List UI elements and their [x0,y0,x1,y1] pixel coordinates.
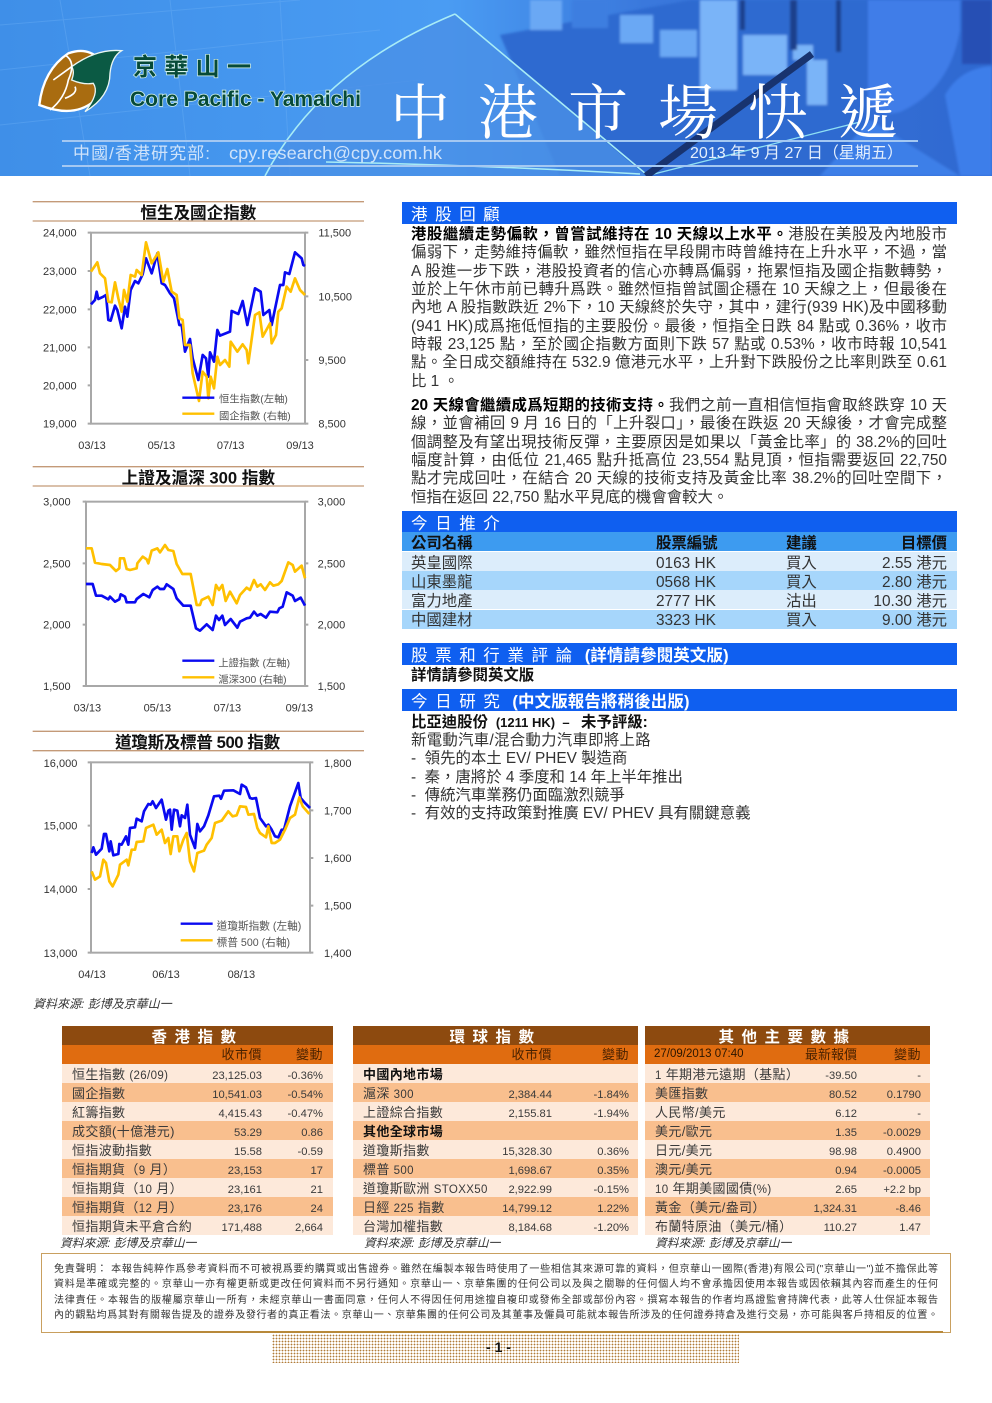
section heading: stock and sector comments [402,643,957,665]
table: Hong Kong indices: 成交額(十億港元) [72,1124,175,1139]
x axis labels: 03/13 [78,440,106,452]
row: 2.55 港元 [882,554,947,572]
table: other key data: -0.0029 [883,1126,921,1138]
company rating: 比亞迪股份 (1211 HK) – 未予評級: [411,714,648,730]
header rules [62,140,918,167]
y axis labels: 21,000 [43,342,77,354]
x axis labels: 09/13 [286,440,314,452]
table header: 公司名稱 [411,534,473,552]
x axis labels [78,969,255,981]
x axis labels [78,440,314,452]
y axis labels: 1,700 [324,805,352,817]
row: 9.00 港元 [882,612,947,629]
table: Hong Kong indices: 恒指期貨（10 月） [72,1181,183,1196]
table: other key data: 澳元/美元 [655,1162,712,1177]
table: global indices: 0.35% [597,1164,629,1176]
row [402,590,957,609]
review paragraph 1: 港股繼續走勢偏軟，曾嘗試維持在 10 天線以上水平。港股在美股及內地股市 [411,226,947,243]
table: global indices: 滬深 300 [363,1086,414,1101]
table: global indices: 上證綜合指數 [363,1105,443,1120]
y axis labels: 22,000 [43,304,77,316]
table: other key data: 98.98 [829,1146,857,1158]
table: Hong Kong indices: 23,161 [228,1184,262,1196]
page number band [272,1334,739,1363]
disclaimer text: 資料是準確或完整的。京華山一亦有權更新或更改任何資料而不另行通知。京華山一、京華集團的任何公司以及與之關聯的任何個人均不會承擔因使用本報告或因依賴其內容而產生的任何 [54,1279,938,1290]
table: Hong Kong indices: -0.59 [298,1146,323,1158]
table: global indices: 日經 225 指數 [363,1200,445,1215]
review paragraph 1: 內地 A 股指數跌近 2%下，10 天線終於失守，其中，建行(939 HK)及中國移動 [411,299,947,316]
review paragraph 2: 幅度計算，由低位 21,465 點升抵高位 23,554 點見頂，恒指需要返回 22,750 [411,452,947,469]
table: global indices: 8,184.68 [508,1222,552,1234]
header banner [0,0,992,176]
review paragraph 1: A 股進一步下跌，港股投資者的信心亦轉爲偏弱，拖累恒指及國企指數轉勢， [411,263,947,280]
series: Shanghai [86,584,305,631]
table: global indices: 收市價 [511,1047,552,1062]
table: global indices: 14,799.12 [502,1202,552,1214]
table: global indices: 道瓊斯指數 [363,1143,430,1158]
y axis labels [43,497,345,693]
table header: 目標價 [901,534,947,552]
department: 中國/香港研究部: [73,144,210,163]
x axis labels: 07/13 [217,440,244,452]
logo text: Core Pacific - Yamaichi [130,88,361,111]
review paragraph 1: 偏弱下，走勢維持偏軟，雖然恒指在早段開市時曾維持在上升水平，不過，當 [411,244,947,261]
heading [402,511,957,532]
table: Hong Kong indices: -0.47% [288,1108,323,1120]
comment note: 詳情請參閱英文版 [411,667,534,684]
logo text [130,54,361,111]
bullet: - 傳統汽車業務仍面臨激烈競爭 [411,787,625,804]
review paragraph 1: 並於上午休市前已轉升爲跌。雖然恒指曾試圖企穩在 10 天線之上，但最後在 [411,281,947,298]
table: Hong Kong indices: 15.58 [234,1146,262,1158]
y axis labels: 14,000 [44,884,77,896]
table: other key data: 美匯指數 [655,1086,708,1101]
y axis labels: 2,500 [318,558,345,570]
review paragraph 1 [411,226,947,390]
review paragraph 1: 比 1 。 [411,373,459,390]
y axis labels: 10,500 [318,291,352,303]
x axis labels: 05/13 [148,440,175,452]
table: global indices: 1.22% [597,1202,629,1214]
table: other key data: 黃金（美元/盎司） [655,1200,766,1215]
table: other key data: 80.52 [829,1088,857,1100]
legend [182,392,291,423]
x axis labels [74,703,313,715]
y axis labels: 24,000 [43,228,77,240]
disclaimer box [41,1253,951,1333]
table: global indices: -0.15% [594,1184,629,1196]
table: global indices: -1.94% [594,1108,629,1120]
series: HSCEI [91,242,305,401]
table: Hong Kong indices: 恒生指數 (26/09) [72,1067,168,1082]
table: global indices: -1.20% [594,1222,629,1234]
x axis labels: 04/13 [78,969,106,981]
chart title: 道瓊斯及標普 500 指數 [115,732,281,752]
chart title [33,731,364,752]
bullet: - 有效的支持政策對推廣 EV/ PHEV 具有關鍵意義 [411,805,750,822]
table: other key data: +2.2 bp [883,1184,921,1196]
row: 買入 [786,612,817,629]
row: 買入 [786,554,817,572]
bullet: - 秦，唐將於 4 季度和 14 年上半年推出 [411,768,683,786]
plot axes [83,502,308,686]
table: other key data: 1 年期港元遠期（基點） [655,1067,799,1082]
table: other key data: 0.4900 [887,1146,921,1158]
x axis labels: 08/13 [228,969,255,981]
table: other key data [645,1026,930,1235]
table: other key data: - [917,1108,921,1120]
series: HSI [91,252,305,380]
table: other key data: -8.46 [896,1202,921,1214]
y axis labels: 3,000 [318,497,345,509]
y axis labels: 8,500 [318,419,346,431]
table source: 資料來源: 彭博及京華山一 [60,1236,196,1250]
y axis labels: 3,000 [43,497,71,509]
chart title: 恒生及國企指數 [140,202,257,222]
table source: 資料來源: 彭博及京華山一 [364,1236,500,1250]
table: Hong Kong indices: 53.29 [234,1126,262,1138]
x axis labels: 09/13 [286,703,313,715]
table: global indices: 中國內地市場 [363,1067,443,1082]
table: Hong Kong indices: 恒指期貨（12 月） [72,1200,183,1215]
logo [39,50,122,112]
legend: 道瓊斯指數 (左軸) [217,919,301,932]
table: other key data: 變動 [894,1047,921,1062]
table: global indices: 變動 [602,1047,629,1062]
row: 10.30 港元 [873,592,947,610]
plot axes [88,233,308,424]
row: 中國建材 [411,612,473,629]
disclaimer text [54,1263,938,1321]
legend: 恒生指數(左軸) [219,392,288,405]
table: other key data: 2.65 [835,1184,857,1196]
chart source note: 資料來源: 彭博及京華山一 [33,997,172,1011]
table: other key data: - [917,1070,921,1082]
y axis labels: 2,000 [318,620,345,632]
chart title [33,467,364,487]
page number band: - 1 - [486,1339,511,1355]
table: other key data: 1.47 [899,1222,921,1234]
email: cpy.research@cpy.com.hk [229,143,442,163]
table: global indices: -1.84% [594,1088,629,1100]
main title: 中港市場快遞 [390,66,898,152]
y axis labels: 2,000 [43,620,71,632]
table: Hong Kong indices: 23,153 [228,1164,262,1176]
y axis labels: 20,000 [43,380,77,392]
table: global indices: 1,698.67 [508,1164,552,1176]
table: global indices: 0.36% [597,1146,629,1158]
table: Hong Kong indices: 恒指期貨（9 月） [72,1162,176,1177]
y axis labels: 23,000 [43,266,77,278]
table: other key data: 美元/歐元 [655,1124,712,1139]
row: 買入 [786,574,817,590]
table: other key data: 10 年期美國國債(%) [655,1181,772,1196]
table: Hong Kong indices: -0.36% [288,1070,323,1082]
table: Hong Kong indices: 恒指波動指數 [72,1143,152,1158]
table: other key data: 布蘭特原油（美元/桶） [655,1219,792,1234]
table: other key data: 最新報價 [805,1047,857,1062]
row [402,610,957,629]
y axis labels: 9,500 [318,355,346,367]
table: global indices: 其他全球市場 [363,1124,443,1139]
table: Hong Kong indices: 紅籌指數 [72,1105,125,1120]
table source: 資料來源: 彭博及京華山一 [655,1236,791,1250]
y axis labels: 1,800 [324,758,352,770]
row: 沽出 [786,592,817,610]
table: global indices: 2,922.99 [508,1184,552,1196]
table header [402,532,957,551]
x axis labels: 05/13 [144,703,171,715]
section heading: today's research: 今日研究 (中文版報告將稍後出版) [411,693,690,711]
review paragraph 2 [411,397,947,506]
row: 2777 HK [656,592,716,610]
y axis labels: 1,500 [43,681,71,693]
table: other key data: -0.0005 [883,1164,921,1176]
legend: 國企指數 (右軸) [219,410,291,423]
table: other key data: 110.27 [824,1222,857,1234]
background cylinders [868,0,960,114]
row: 3323 HK [656,612,716,629]
legend [182,656,290,686]
section heading: HK market review [402,202,957,224]
row: 0568 HK [656,574,716,590]
section heading: HK market review: 港股回顧 [411,206,507,224]
table: Hong Kong indices: 恒指期貨未平倉合約 [72,1219,192,1234]
background data block [500,0,950,176]
table: global indices: 2,155.81 [508,1108,552,1120]
row: 富力地產 [411,592,473,610]
table: other key data: 27/09/2013 07:40 [654,1048,744,1060]
table: Hong Kong indices: 0.86 [301,1126,323,1138]
table: Hong Kong indices: 10,541.03 [212,1088,262,1100]
chart: Dow Jones and S&P 500 [32,730,364,981]
review paragraph 1: 點。全日成交額維持在 532.9 億港元水平，上升對下跌股份之比率則跌至 0.61 [411,354,947,371]
panel: today's recommendations [402,511,957,629]
table: Hong Kong indices: 收市價 [221,1047,262,1062]
research title: 新電動汽車/混合動力汽車即將上路 [411,732,651,749]
table: other key data: -39.50 [825,1070,857,1082]
table: Hong Kong indices: 171,488 [222,1222,262,1234]
legend: 上證指數 (左軸) [218,656,290,669]
table: Hong Kong indices: 21 [311,1184,323,1196]
background bars [530,0,827,105]
y axis labels: 1,500 [324,901,352,913]
table: global indices: 台灣加權指數 [363,1219,443,1234]
table header: 股票編號 [656,534,718,552]
table: Hong Kong indices: 2,664 [295,1222,323,1234]
table: other key data: 1,324.31 [813,1202,857,1214]
y axis labels: 1,500 [318,681,345,693]
review paragraph 2: 線，並會補回 9 月 16 日的「上升裂口」，最後在跌返 20 天線後，才會完成整 [411,415,947,432]
chart title [33,202,364,222]
legend: 滬深300 (右軸) [218,673,287,686]
background fan [265,14,646,176]
table: other key data: 1.35 [835,1126,857,1138]
y axis labels: 15,000 [44,821,77,833]
table: global indices: 15,328.30 [502,1146,552,1158]
table: Hong Kong indices [62,1026,333,1235]
bullet: - 領先的本土 EV/ PHEV 製造商 [411,750,627,767]
series: S&P 500 [92,797,309,886]
row [402,552,957,571]
y axis labels: 2,500 [43,558,71,570]
table: other key data: 0.1790 [887,1088,921,1100]
table: Hong Kong indices: 變動 [296,1047,323,1062]
table: Hong Kong indices: 17 [311,1164,323,1176]
table: Hong Kong indices: 23,125.03 [212,1070,262,1082]
table: other key data: 人民幣/美元 [655,1105,726,1120]
chart: Shanghai and CSI 300 [32,466,364,715]
row: 0163 HK [656,554,716,572]
chart: Hang Seng and HSCEI [32,201,364,452]
logo text: 京華山一 [133,54,251,81]
table: Hong Kong indices: 4,415.43 [218,1108,262,1120]
disclaimer text: 內的觀點均爲其對有關報告提及的證券及發行者的真正看法。京華山一、京華集團的任何公司及其董事及僱員可能就本報告所涉及的任何證券持倉及進行交易，亦可能與客戶持相反的位置。 [54,1310,938,1321]
row: 山東墨龍 [411,574,473,590]
x axis labels: 03/13 [74,703,101,715]
research summary [411,714,750,822]
table: other key data: 日元/美元 [655,1143,712,1158]
row: 2.80 港元 [882,574,947,590]
x axis labels: 07/13 [214,703,241,715]
table: Hong Kong indices: 24 [311,1202,323,1214]
table: global indices: 道瓊斯歐洲 STOXX50 [363,1181,488,1196]
y axis labels: 1,400 [324,948,352,960]
table: other key data: 0.94 [835,1164,857,1176]
disclaimer text: 法律責任。本報告的版權屬京華山一所有，未經京華山一書面同意，任何人不得因任何用途擅自複印或發佈全部或部份內容。撰寫本報告的作者均爲證監會持牌代表，此等人仕保証本報告 [54,1295,938,1306]
disclaimer text: 免責聲明： 本報告純粹作爲參考資料而不可被視爲要約購買或出售證券。雖然在編製本報告時使用了一些相信其來源可靠的資料，但京華山一國際(香港)有限公司("京華山一")並不擔保此等 [54,1264,938,1275]
table: global indices: 2,384.44 [508,1088,552,1100]
table: Hong Kong indices: 23,176 [228,1202,262,1214]
review paragraph 2: 恒指在返回 22,750 點水平見底的機會會較大。 [411,489,728,506]
table header: 建議 [786,534,817,552]
y axis labels [44,758,352,960]
section heading: stock and sector comments: 股票和行業評論 (詳情請參閱英文版) [411,647,729,665]
chart title: 上證及滬深 300 指數 [122,467,275,487]
series: CSI 300 [86,545,305,605]
table: Hong Kong indices: 國企指數 [72,1086,125,1101]
y axis labels: 1,600 [324,853,352,865]
table: other key data: 6.12 [835,1108,857,1120]
legend [181,919,301,949]
row [402,571,957,590]
table: Hong Kong indices: -0.54% [288,1088,323,1100]
table: global indices [353,1026,638,1235]
y axis labels: 19,000 [43,419,77,431]
table: global indices: 標普 500 [363,1162,414,1177]
row: 英皇國際 [411,554,473,572]
y axis labels [43,228,352,431]
section heading: today's research [402,689,957,711]
review paragraph 1: (941 HK)成爲拖低恒指的主要股份。最後，恒指全日跌 84 點或 0.36%，收市 [411,318,947,335]
review paragraph 2: 點才完成回吐，在結合 20 天線的技術支持及黃金比率 38.2%的回吐空間下， [411,470,947,487]
y axis labels: 13,000 [44,948,77,960]
plot axes [88,762,313,953]
y axis labels: 16,000 [44,758,77,770]
date: 2013 年 9 月 27 日（星期五） [690,144,903,162]
review paragraph 2: 個調整及有望出現技術反彈，主要原因是如果以「黃金比率」的 38.2%的回吐 [411,434,947,451]
x axis labels: 06/13 [152,969,180,981]
series: Dow Jones [92,783,310,855]
disclaimer shadow rule [70,1331,943,1333]
legend: 標普 500 (右軸) [217,936,290,949]
review paragraph 2: 20 天線會繼續成爲短期的技術支持。我們之前一直相信恒指會取終跌穿 10 天 [411,397,947,414]
y axis labels: 11,500 [318,228,351,240]
review paragraph 1: 時報 23,125 點，至於國企指數方面則下跌 57 點或 0.53%，收市時報 10,541 [411,336,947,353]
